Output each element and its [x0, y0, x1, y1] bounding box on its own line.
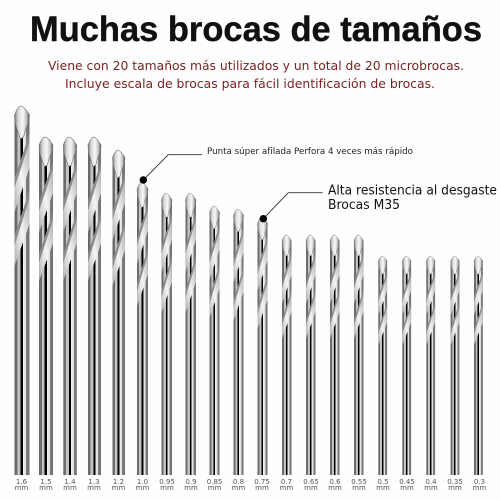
drill 0.75 mm: mm — [255, 484, 269, 492]
drill 0.6 mm: 0.6 — [329, 478, 341, 486]
drill 1.5 mm: mm — [39, 484, 53, 492]
drill 0.85 mm: mm — [208, 484, 221, 492]
drill 0.5 mm — [376, 256, 390, 492]
drill 0.4 mm: mm — [424, 484, 438, 492]
drill 0.95 mm: mm — [160, 484, 174, 492]
drill 0.95 mm — [159, 193, 175, 492]
drill 0.85 mm: 0.85 — [207, 478, 222, 486]
drill 1.2 mm: mm — [112, 484, 125, 492]
drill 0.6 mm — [328, 235, 342, 492]
drill 1.3 mm: mm — [87, 484, 101, 492]
drill 0.5 mm: 0.5 — [377, 478, 389, 486]
drill 0.85 mm — [207, 206, 222, 492]
drill 0.3 mm: 0.3 — [474, 478, 485, 486]
drill 0.35 mm — [447, 256, 463, 492]
drill 1.2 mm: 1.2 — [113, 478, 124, 486]
subtitle text block: Viene con 20 tamaños más utilizados y un total de 20 microbrocas. — [48, 59, 464, 73]
drill 0.75 mm: 0.75 — [254, 478, 270, 486]
drill 1.3 mm: 1.3 — [88, 478, 100, 486]
drill 0.45 mm — [399, 256, 415, 492]
drill 0.55 mm: mm — [352, 484, 366, 492]
drill 1.6 mm — [14, 106, 30, 492]
drill 0.55 mm — [351, 235, 367, 492]
drill 0.7 mm: mm — [280, 484, 293, 492]
callout: wear resistance: Brocas M35 — [328, 198, 400, 213]
drill 0.75 mm — [254, 217, 270, 492]
callout: sharp tip: Punta súper afilada Perfora 4 veces más rápido — [207, 147, 413, 157]
drill 0.6 mm: mm — [328, 484, 342, 492]
drill 0.9 mm — [184, 193, 198, 492]
subtitle text block: Incluye escala de brocas para fácil identificación de brocas. — [65, 77, 435, 91]
drill 0.8 mm: mm — [232, 484, 245, 492]
drill 0.95 mm: 0.95 — [159, 478, 175, 486]
drill 1.4 mm: mm — [63, 484, 77, 492]
callout: sharp tip — [140, 147, 413, 184]
drill 1.0 mm: 1.0 — [137, 478, 148, 486]
drill 0.9 mm: 0.9 — [185, 478, 197, 486]
drill 0.7 mm — [280, 235, 293, 492]
drill 0.35 mm: mm — [448, 484, 462, 492]
drill 0.4 mm — [424, 256, 438, 492]
drill 0.5 mm: mm — [376, 484, 390, 492]
drill 0.35 mm: 0.35 — [447, 478, 463, 486]
drill 0.3 mm — [473, 256, 486, 492]
drill 0.65 mm: mm — [304, 484, 318, 492]
drill 0.9 mm: mm — [184, 484, 198, 492]
drill 1.4 mm — [63, 137, 77, 492]
callout: wear resistance — [260, 184, 497, 222]
drill 0.8 mm: 0.8 — [233, 478, 244, 486]
drill 1.0 mm: mm — [136, 484, 149, 492]
drill 0.55 mm: 0.55 — [351, 478, 367, 486]
drill 0.65 mm: 0.65 — [303, 478, 319, 486]
drill 1.6 mm: 1.6 — [16, 478, 27, 486]
drill 1.0 mm — [136, 182, 149, 492]
drill 0.45 mm: 0.45 — [399, 478, 415, 486]
drill 0.45 mm: mm — [400, 484, 414, 492]
drill 0.3 mm: mm — [473, 484, 486, 492]
drill 1.6 mm: mm — [15, 484, 28, 492]
drill 1.5 mm — [39, 137, 53, 492]
drill 1.4 mm: 1.4 — [64, 478, 76, 486]
title: Muchas brocas de tamaños — [30, 10, 482, 49]
drill 1.2 mm — [112, 150, 125, 492]
drill 0.65 mm — [303, 235, 319, 492]
drill 0.4 mm: 0.4 — [425, 478, 437, 486]
subtitle text block — [48, 59, 464, 91]
drill 1.5 mm: 1.5 — [40, 478, 52, 486]
drill 0.8 mm — [232, 209, 245, 492]
drill 1.3 mm — [87, 137, 101, 492]
drill 0.7 mm: 0.7 — [281, 478, 292, 486]
